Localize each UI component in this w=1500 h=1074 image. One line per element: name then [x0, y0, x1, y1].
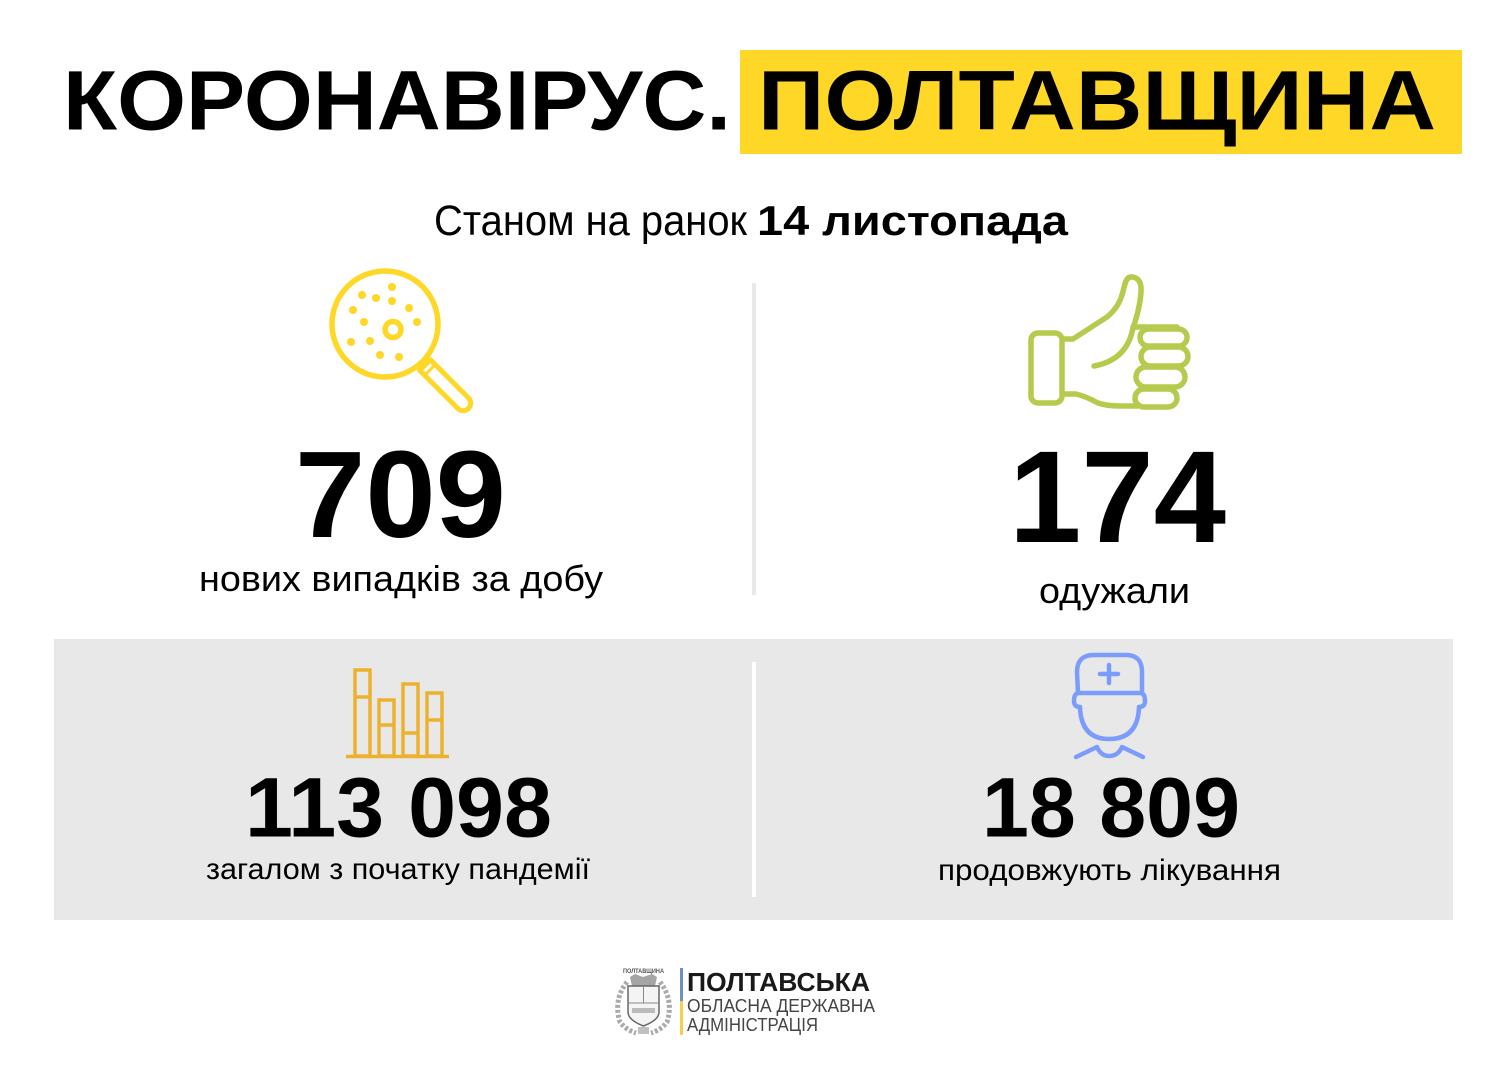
title — [63, 50, 1462, 154]
stat: recovered: 174 — [1009, 423, 1226, 570]
title: КОРОНАВІРУС. — [63, 54, 731, 148]
stat: recovered: одужали — [1039, 570, 1190, 611]
icon: coat of arms — [618, 969, 669, 1034]
subtitle: date — [434, 197, 1069, 245]
stat: new cases: 709 — [295, 427, 506, 564]
flag bar — [680, 968, 683, 1001]
stat: total cases — [206, 760, 591, 886]
stat: total cases: 113 098 — [245, 760, 552, 854]
logo: Poltava regional administration: ПОЛТАВСЬКА — [687, 967, 870, 997]
icon: doctor — [1074, 655, 1145, 757]
stat: under treatment — [938, 760, 1281, 887]
subtitle: date: Станом на ранок — [434, 197, 748, 245]
subtitle: date: 14 листопада — [757, 197, 1069, 244]
title: ПОЛТАВЩИНА — [758, 54, 1436, 148]
icon: bar chart — [346, 670, 449, 756]
panel: totals background — [54, 639, 1453, 920]
vertical divider bottom — [752, 662, 756, 897]
vertical divider top — [752, 283, 756, 595]
icon: coat of arms: ПОЛТАВЩИНА — [623, 969, 665, 975]
logo: Poltava regional administration: АДМІНІСТРАЦІЯ — [687, 1015, 818, 1035]
stat: new cases — [199, 427, 603, 599]
icon: thumbs up — [1031, 277, 1188, 407]
logo: Poltava regional administration: ОБЛАСНА ДЕРЖАВНА — [687, 996, 875, 1016]
stat: under treatment: продовжують лікування — [938, 854, 1281, 887]
stat: under treatment: 18 809 — [982, 760, 1240, 854]
logo: Poltava regional administration — [618, 967, 875, 1035]
stat: total cases: загалом з початку пандемії — [206, 853, 591, 886]
stat: new cases: нових випадків за добу — [199, 558, 603, 599]
icon: magnifier with virus — [332, 271, 474, 414]
